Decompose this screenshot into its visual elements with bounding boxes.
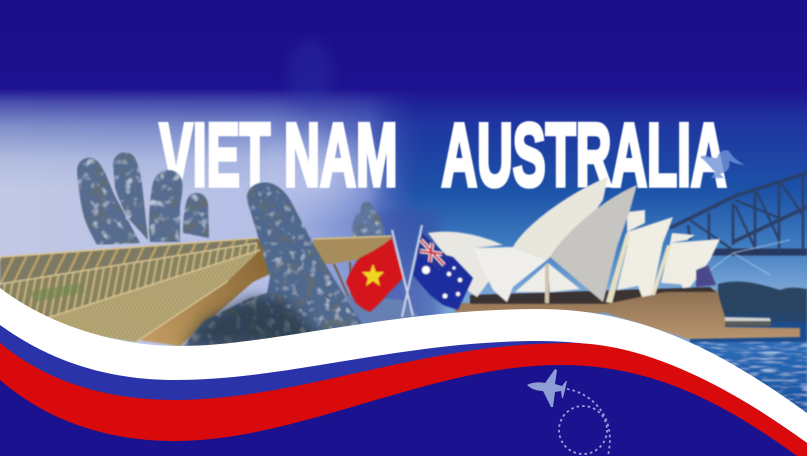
harbour shoreline and water bbox=[690, 282, 807, 417]
far bridge section bbox=[313, 236, 392, 300]
sail E bbox=[627, 210, 645, 232]
dark palm shadow bbox=[183, 296, 330, 346]
icon: kangaroo watermark bbox=[700, 150, 745, 178]
inner sails right bbox=[617, 243, 690, 290]
flags bbox=[346, 225, 473, 317]
Sydney Opera House bbox=[428, 177, 800, 339]
front railing bbox=[0, 243, 260, 318]
big thumb and palm bbox=[183, 182, 362, 346]
dark band beneath sails bbox=[470, 287, 716, 304]
blue backdrop behind flags bbox=[345, 295, 420, 332]
sail B bbox=[474, 247, 547, 302]
Sydney Harbour Bridge bbox=[670, 173, 807, 285]
sail C bbox=[513, 177, 608, 260]
sail A bbox=[428, 232, 503, 297]
far hand: three fingers bbox=[352, 202, 385, 240]
title: Viet Nam: VIET NAM bbox=[160, 104, 398, 204]
green foliage glimpses bbox=[28, 283, 85, 302]
purple flag behind bbox=[696, 265, 716, 287]
podium bbox=[455, 290, 800, 339]
ribbon wave: red band bbox=[0, 343, 807, 456]
Golden Bridge deck bbox=[0, 238, 272, 346]
ribbon wave: navy base bbox=[0, 365, 797, 456]
small inner sails bbox=[515, 263, 580, 292]
finger 1 bbox=[77, 158, 140, 245]
sail H bbox=[670, 239, 720, 288]
flight path dashes bbox=[559, 389, 610, 456]
Viet Nam star bbox=[362, 264, 384, 286]
ribbon wave: white band bbox=[0, 288, 807, 456]
Union Jack canton bbox=[417, 233, 448, 271]
column bbox=[545, 264, 549, 303]
flag poles bbox=[392, 225, 422, 317]
finger 2 bbox=[113, 152, 148, 240]
Commonwealth and Southern Cross stars bbox=[422, 266, 462, 298]
flag: Viet Nam bbox=[346, 238, 403, 312]
sail F bbox=[627, 217, 673, 297]
sail G bbox=[670, 233, 695, 243]
finger 3 bbox=[149, 170, 183, 242]
strut bbox=[606, 233, 630, 303]
back railing bbox=[0, 239, 257, 284]
sail D bbox=[550, 185, 637, 302]
flag: Australia bbox=[413, 233, 473, 310]
icon: airplane bbox=[527, 369, 567, 407]
ribbon wave: blue band bbox=[0, 325, 807, 456]
boat bbox=[725, 320, 771, 326]
strut right bbox=[651, 245, 671, 295]
Golden Bridge stone hands bbox=[77, 152, 385, 245]
finger 4 bbox=[183, 193, 209, 238]
lower fascia bbox=[47, 250, 260, 342]
